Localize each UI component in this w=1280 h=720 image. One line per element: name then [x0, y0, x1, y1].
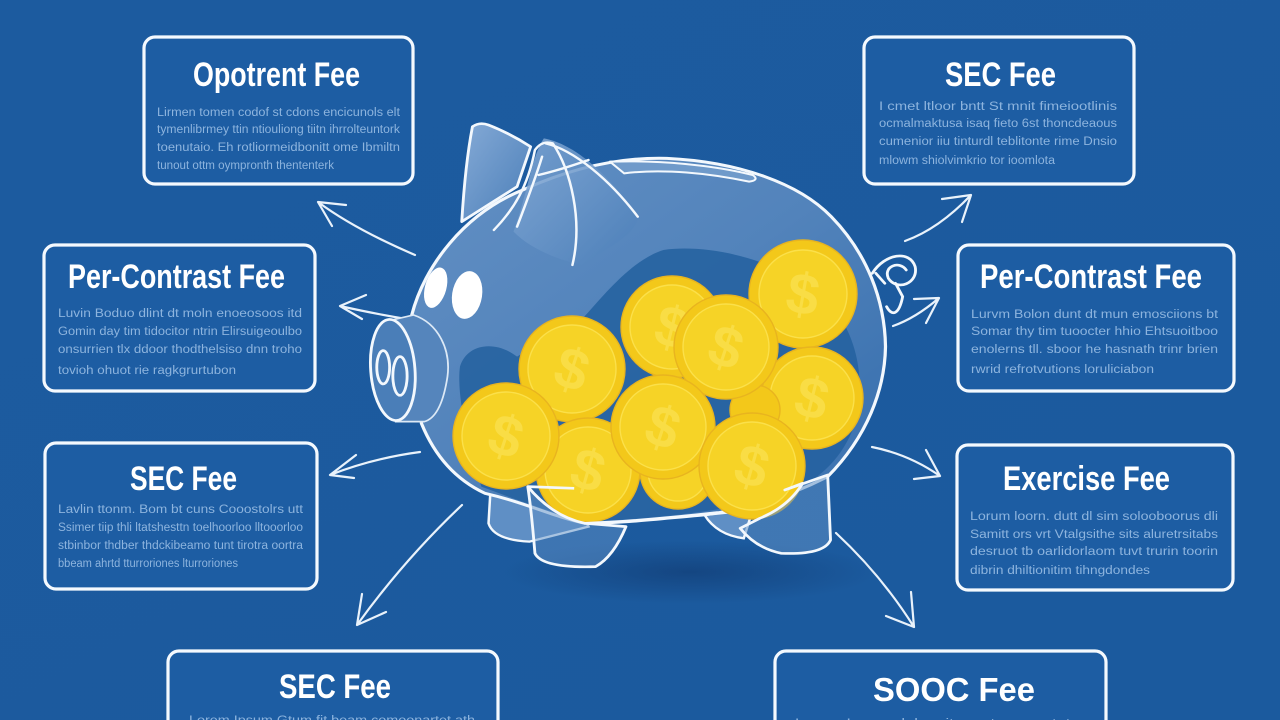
coin	[640, 433, 716, 509]
text block: SEC Fee top right description: ocmalmaktusa isaq fieto 6st thoncdeaous	[879, 118, 1117, 130]
coin	[611, 375, 715, 479]
text block: Opotrent Fee description: Lirmen tomen codof st cdons encicunols elt	[157, 107, 401, 119]
heading: SOOC Fee: SOOC Fee	[873, 671, 1035, 708]
text block: SEC Fee top right description: I cmet ltloor bntt St mnit fimeiootlinis	[879, 101, 1117, 113]
text block: Per-Contrast Fee right description: rwrid refrotvutions loruliciabon	[971, 364, 1154, 376]
panel: Per-Contrast Fee left	[44, 245, 315, 391]
text block: Exercise Fee description: Lorum loorn. dutt dl sim solooboorus dli	[970, 511, 1218, 523]
text block: Exercise Fee description	[970, 511, 1218, 577]
heading: SEC Fee bottom: SEC Fee	[279, 668, 391, 706]
coin: $	[648, 292, 695, 363]
arrow: to Per-Contrast Fee right	[893, 298, 939, 326]
heading: Per-Contrast Fee right: Per-Contrast Fee	[980, 258, 1202, 296]
panel: Per-Contrast Fee right	[958, 245, 1234, 391]
text block: SEC Fee left description: Lavlin ttonm. Bom bt cuns Cooostolrs utt	[58, 504, 304, 516]
panel: SOOC Fee	[775, 651, 1106, 720]
text block: Opotrent Fee description: toenutaio. Eh rotliormeidbonitt ome Ibmiltn	[157, 142, 400, 154]
text block: Per-Contrast Fee right description: enolerns tll. sboor he hasnath trinr brien	[971, 344, 1218, 356]
coin	[674, 295, 778, 399]
arrow: to SEC Fee top right	[905, 195, 971, 241]
text block: Opotrent Fee description	[157, 107, 401, 172]
text block: Per-Contrast Fee left description: Luvin Boduo dlint dt moln enoeosoos itd	[58, 308, 302, 320]
heading: Exercise Fee: Exercise Fee	[1003, 460, 1170, 498]
arrow: to SOOC Fee	[836, 533, 914, 627]
heading: Per-Contrast Fee left: Per-Contrast Fee	[68, 258, 285, 296]
text block: Opotrent Fee description: tunout ottm oympronth thententerk	[157, 160, 334, 172]
text block: Exercise Fee description: Samitt ors vrt Vtalgsithe sits aluretrsitabs	[970, 529, 1218, 541]
arrow: to Exercise Fee	[872, 447, 940, 479]
heading: SEC Fee left: SEC Fee	[130, 460, 237, 498]
coin	[519, 316, 625, 422]
coin: $	[781, 260, 824, 329]
coin	[730, 385, 780, 435]
text block: SEC Fee left description: stbinbor thdber thdckibeamo tunt tirotra oortra	[58, 540, 304, 552]
coin: $	[563, 435, 612, 506]
text block: Per-Contrast Fee right description: Somar thy tim tuoocter hhio Ehtsuoitboo	[971, 326, 1218, 338]
pig legs	[528, 475, 831, 567]
coin	[621, 276, 723, 378]
heading: SEC Fee top right: SEC Fee	[945, 56, 1056, 94]
coin: $	[727, 431, 776, 502]
text block: Exercise Fee description: desruot tb oarlidorlaom tuvt trurin toorin	[970, 546, 1218, 558]
arrow: to SEC Fee left	[330, 452, 420, 478]
text block: SEC Fee top right description: cumenior iiu tinturdl teblitonte rime Dnsio	[879, 136, 1117, 148]
text block: Per-Contrast Fee left description: onsurrien tlx ddoor thodthelsiso dnn troho	[58, 344, 302, 356]
coin: $	[700, 312, 751, 383]
heading: Opotrent Fee: Opotrent Fee	[193, 56, 360, 94]
text block: Exercise Fee description: dibrin dhiltionitim tihngdondes	[970, 565, 1150, 577]
text block: Opotrent Fee description: tymenlibrmey ttin ntiouliong tiitn ihrrolteuntork	[157, 124, 400, 136]
coin: $	[637, 392, 688, 463]
text block: Per-Contrast Fee left description	[58, 308, 302, 377]
text block: Per-Contrast Fee left description: tovioh ohuot rie ragkgrurtubon	[58, 365, 236, 377]
panel: Opotrent Fee	[144, 37, 413, 184]
text block: SEC Fee left description	[58, 504, 304, 570]
text block: SEC Fee top right description: mlowm shiolvimkrio tor ioomlota	[879, 155, 1056, 167]
text block: Per-Contrast Fee right description	[971, 309, 1219, 376]
panel: SEC Fee bottom	[168, 651, 498, 720]
panel: Exercise Fee	[957, 445, 1233, 590]
text block: Per-Contrast Fee left description: Gomin day tim tidocitor ntrin Elirsuigeoulbo	[58, 326, 302, 338]
arrow: to Opotrent Fee	[318, 202, 415, 255]
shadow under pig	[500, 540, 880, 604]
coin	[536, 418, 640, 522]
coins	[453, 240, 863, 522]
coin: $	[546, 334, 597, 405]
text block: SEC Fee top right description	[879, 101, 1117, 167]
text block: SEC Fee left description: bbeam ahrtd tturroriones lturroriones	[58, 558, 238, 570]
text block: Per-Contrast Fee right description: Lurvm Bolon dunt dt mun emosciions bt	[971, 309, 1219, 321]
coin	[453, 383, 559, 489]
text block: SEC Fee left description: Ssimer tiip thli ltatshesttn toelhoorloo lltooorloo	[58, 522, 303, 534]
panel: SEC Fee left	[45, 443, 317, 589]
coin: $	[480, 401, 531, 472]
coin	[761, 347, 863, 449]
coin	[699, 413, 805, 519]
icon: transparent piggy bank with coins	[367, 124, 916, 567]
coin	[749, 240, 857, 348]
arrow: to SEC Fee bottom	[357, 505, 462, 625]
pig body	[367, 124, 916, 542]
coin: $	[788, 363, 835, 434]
arrow: to Per-Contrast Fee left	[340, 295, 412, 320]
panel: SEC Fee top right	[864, 37, 1134, 184]
